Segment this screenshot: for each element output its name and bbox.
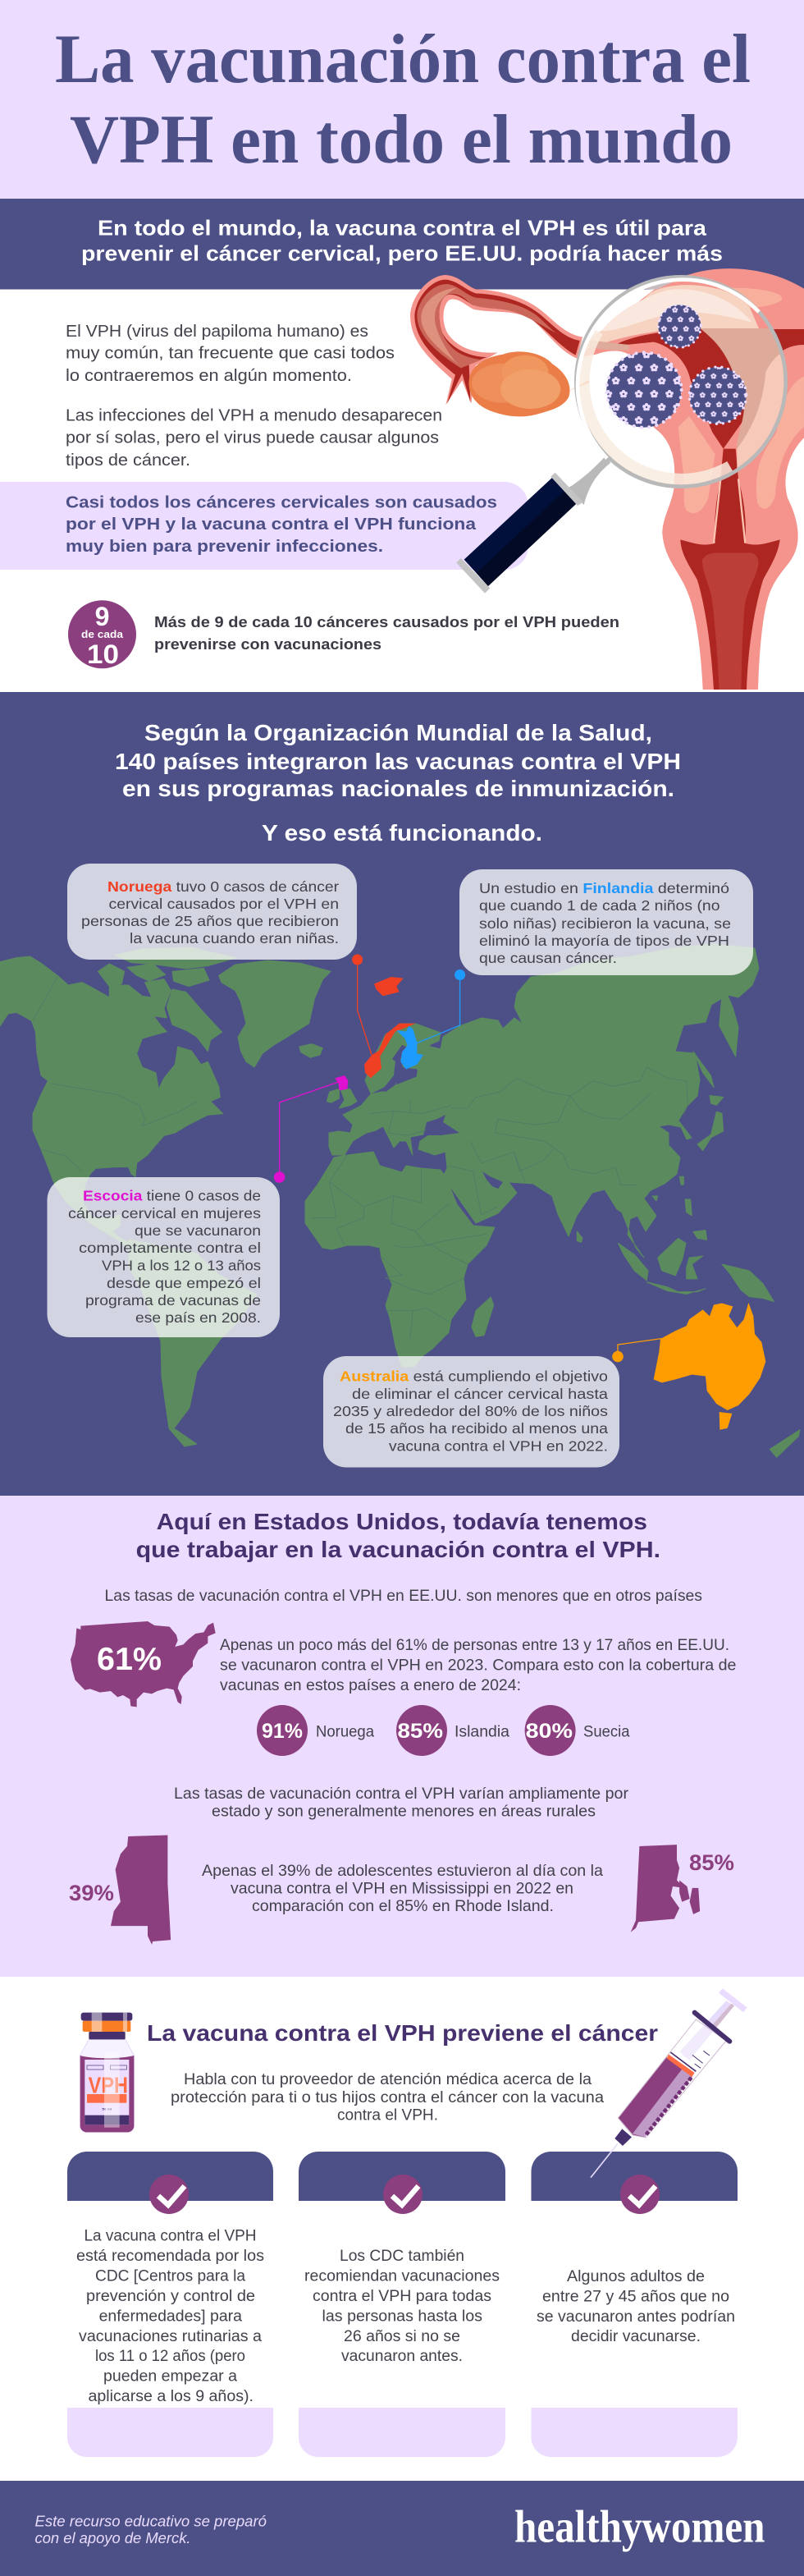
card text: aplicarse a los 9 años). (89, 2388, 254, 2405)
Norway and Svalbard highlighted (364, 977, 416, 1078)
stat: Islandia 85% (396, 1705, 509, 1756)
virus particles (606, 305, 747, 428)
callout: Noruega (67, 864, 357, 960)
Scandinavia (365, 1024, 441, 1093)
panel: title header (0, 0, 804, 199)
text: Mississippi vs Rhode Island: Apenas el 39% de adolescentes estuvieron al día con la (202, 1862, 603, 1880)
icon: check (620, 2175, 660, 2214)
callout: Finlandia: Un estudio en Finlandia determinó (479, 880, 729, 896)
callout: Noruega: personas de 25 años que recibieron (81, 913, 339, 929)
card text: La vacuna contra el VPH (84, 2227, 256, 2244)
logo wordmark: healthywomen (514, 2502, 765, 2553)
Iceland and Ireland and England (299, 1044, 357, 1108)
callout: Escocia: Escocia tiene 0 casos de (83, 1187, 261, 1203)
panel: United States section (0, 1496, 804, 1977)
callout: Australia: de eliminar el cáncer cervical hasta (352, 1386, 608, 1402)
callout: Escocia: desde que empezó el (107, 1275, 261, 1291)
stat: Suecia 80%: 80% (526, 1720, 573, 1743)
callout: Australia: de 15 años ha recibido al menos una (345, 1420, 608, 1437)
callout: Escocia (48, 1177, 280, 1337)
US map with 61% (71, 1621, 216, 1707)
Eurasia (329, 944, 759, 1258)
Rhode Island map with 85% (631, 1845, 734, 1932)
stat: Suecia 80% (525, 1705, 630, 1756)
card text: vacunaciones rutinarias a (79, 2328, 262, 2345)
callout: Noruega: Noruega tuvo 0 casos de cáncer (107, 878, 339, 895)
callout: key message pill: por el VPH y la vacuna contra el VPH funciona (66, 516, 477, 534)
callout: Escocia: programa de vacunas de (85, 1292, 261, 1309)
card: adults 27-45 (532, 2152, 738, 2457)
North America (0, 947, 236, 1248)
card text: entre 27 y 45 años que no (542, 2288, 729, 2305)
Mississippi map with 39%: 39% (69, 1881, 114, 1905)
panel: footer (0, 2481, 804, 2576)
seas (384, 1045, 503, 1189)
card text: las personas hasta los (322, 2308, 482, 2325)
icon: vaccine vial: VPH (89, 2072, 128, 2097)
Greenland (219, 960, 331, 1067)
stat: Noruega 91% (257, 1705, 374, 1756)
text: Mississippi vs Rhode Island: comparación con el 85% en Rhode Island. (252, 1897, 554, 1915)
callout: key message pill (0, 482, 528, 570)
text: 61% description: vacunas en estos países a enero de 2024: (220, 1676, 521, 1694)
callout: Finlandia: que cuando 1 de cada 2 niños (no (479, 897, 720, 914)
Madagascar and Sri Lanka (472, 1231, 582, 1336)
stat: Suecia 80%: Suecia (583, 1722, 630, 1740)
text: talk to provider: Habla con tu proveedor de atención médica acerca de la (184, 2071, 592, 2088)
world heading: Según la Organización Mundial de la Salud, (144, 720, 652, 745)
sponsor note (34, 2514, 267, 2546)
text: state variation: estado y son generalmente menores en áreas rurales (212, 1803, 596, 1821)
callout: Australia: Australia está cumpliendo el objetivo (340, 1368, 608, 1384)
card text: recomiendan vacunaciones (304, 2267, 500, 2285)
card text: se vacunaron antes podrían (537, 2308, 735, 2326)
card text (76, 2227, 264, 2405)
US map with 61%: 61% (97, 1642, 162, 1677)
text: 61% description (220, 1636, 736, 1694)
panel: vaccine prevents cancer section (0, 1977, 804, 2481)
uterus inner layers (613, 288, 804, 690)
text block: intro: Las infecciones del VPH a menudo desaparecen (66, 407, 442, 425)
text block: intro: por sí solas, pero el virus puede causar algunos (66, 429, 439, 447)
text block: intro: lo contraeremos en algún momento. (66, 367, 352, 385)
connector: Escocia (274, 1081, 341, 1183)
title: La vacunación contra el (55, 21, 751, 98)
connector: Noruega (352, 954, 372, 1055)
panel: world section (0, 692, 804, 1496)
subtitle heading: prevenir el cáncer cervical, pero EE.UU. podría hacer más (81, 241, 723, 266)
stat: 9 de cada 10: 10 (87, 639, 119, 669)
South America (129, 1240, 257, 1446)
text: state variation: Las tasas de vacunación contra el VPH varían ampliamente por (174, 1785, 629, 1803)
callout: Escocia: completamente contra el (79, 1240, 261, 1256)
card text: enfermedades] para (99, 2308, 242, 2325)
text: state variation (174, 1785, 629, 1821)
title: VPH en todo el mundo (70, 101, 733, 178)
icon: syringe (591, 1991, 745, 2178)
callout: Australia: vacuna contra el VPH en 2022. (389, 1438, 608, 1455)
icon: vaccine vial (80, 2013, 134, 2132)
text: Mississippi vs Rhode Island (202, 1862, 603, 1915)
callout: Escocia: cáncer cervical en mujeres (68, 1205, 261, 1222)
US heading: Aquí en Estados Unidos, todavía tenemos (157, 1509, 647, 1534)
callout: key message pill: Casi todos los cánceres cervicales son causados (66, 494, 497, 512)
text block: stat description (154, 613, 619, 653)
Australia highlighted (654, 1303, 765, 1430)
stat: 9 de cada 10 (68, 600, 136, 669)
icon: vaccine vial: 50 ml (102, 2107, 112, 2111)
stat: Islandia 85%: Islandia (455, 1722, 509, 1740)
callout: Escocia: que se vacunaron (135, 1222, 261, 1239)
card text: Los CDC también (340, 2248, 464, 2265)
stat: Noruega 91%: 91% (262, 1720, 303, 1743)
card: up to 26 (299, 2152, 505, 2457)
panel: subtitle band (0, 199, 804, 289)
connector: Australia (612, 1339, 661, 1362)
world heading: en sus programas nacionales de inmunización. (122, 776, 674, 801)
uterus body (582, 268, 804, 690)
sponsor note: Este recurso educativo se preparó (34, 2514, 267, 2530)
icon: check (149, 2175, 189, 2214)
card text: contra el VPH para todas (313, 2288, 491, 2305)
subtitle heading (81, 216, 723, 266)
US heading: que trabajar en la vacunación contra el VPH. (136, 1537, 660, 1562)
text: talk to provider: contra el VPH. (337, 2107, 438, 2125)
text block: intro: tipos de cáncer. (66, 451, 190, 470)
text block: intro: El VPH (virus del papiloma humano) es (66, 323, 368, 341)
magnifier lens (576, 277, 788, 487)
card text: vacunaron antes. (341, 2348, 463, 2365)
text: Mississippi vs Rhode Island: vacuna contra el VPH en Mississippi en 2022 en (231, 1880, 573, 1898)
card text: pueden empezar a (103, 2368, 237, 2386)
callout: Finlandia: eliminó la mayoría de tipos de VPH (479, 933, 729, 949)
callout: Noruega: la vacuna cuando eran niñas. (130, 930, 339, 947)
text: talk to provider (171, 2071, 604, 2125)
icon: check (383, 2175, 423, 2214)
callout: Escocia: ese país en 2008. (135, 1309, 261, 1326)
country borders (312, 1067, 688, 1338)
world heading (115, 720, 681, 846)
stat: Islandia 85%: 85% (397, 1720, 443, 1743)
card text: los 11 o 12 años (pero (95, 2348, 245, 2365)
Mississippi map with 39% (69, 1836, 171, 1945)
section heading: La vacuna contra el VPH previene el cáncer (147, 2020, 658, 2046)
illustration: uterus with magnifying glass and virus (410, 268, 804, 690)
card text: decidir vacunarse. (571, 2328, 701, 2345)
text: 61% description: se vacunaron contra el VPH en 2023. Compara esto con la cobertura de (220, 1657, 736, 1675)
ovary (468, 351, 621, 416)
text block: stat description: prevenirse con vacunaciones (154, 635, 381, 653)
card text: está recomendada por los (76, 2248, 264, 2265)
Africa (305, 1152, 495, 1367)
text: rates lower: Las tasas de vacunación contra el VPH en EE.UU. son menores que en otros países (105, 1587, 702, 1605)
text: 61% description: Apenas un poco más del 61% de personas entre 13 y 17 años en EE.UU. (220, 1636, 729, 1654)
title (55, 21, 751, 178)
card text: prevención y control de (86, 2288, 255, 2305)
Finland highlighted (396, 1026, 423, 1070)
stat: Noruega 91%: Noruega (316, 1722, 374, 1740)
text block: intro (66, 323, 442, 470)
sponsor note: con el apoyo de Merck. (34, 2530, 190, 2546)
world heading: Y eso está funcionando. (262, 820, 542, 846)
subtitle heading: En todo el mundo, la vacuna contra el VPH es útil para (98, 216, 707, 241)
card text (304, 2248, 500, 2365)
stat: 9 de cada 10: 9 (95, 602, 109, 631)
card text: Algunos adultos de (567, 2268, 705, 2285)
text: talk to provider: protección para ti o tus hijos contra el cáncer con la vacuna (171, 2089, 604, 2106)
callout: Finlandia: solo niñas) recibieron la vacuna, se (479, 915, 731, 932)
card text: 26 años si no se (344, 2328, 460, 2345)
magnifier handle (456, 454, 610, 594)
connector: Finlandia (410, 969, 465, 1046)
callout: Escocia: VPH a los 12 o 13 años (102, 1258, 261, 1274)
stat: 9 de cada 10: de cada (81, 628, 124, 640)
world heading: 140 países integraron las vacunas contra el VPH (115, 749, 681, 774)
callout: Noruega: cervical causados por el VPH en (108, 896, 339, 912)
callout: Finlandia (459, 869, 753, 975)
world map (0, 944, 800, 1457)
card: recommended for 11-12 (67, 2152, 273, 2457)
Rhode Island map with 85%: 85% (689, 1850, 734, 1875)
callout: key message pill: muy bien para prevenir infecciones. (66, 538, 383, 556)
Scotland highlighted (335, 1075, 348, 1090)
callout: Australia: 2035 y alrededor del 80% de los niños (333, 1403, 608, 1419)
fallopian tube (410, 275, 582, 405)
text block: stat description: Más de 9 de cada 10 cánceres causados por el VPH pueden (154, 613, 619, 630)
Asia-Pacific islands (618, 995, 800, 1457)
callout: Australia (323, 1356, 619, 1468)
card text (537, 2268, 735, 2345)
card text: CDC [Centros para la (95, 2267, 245, 2285)
US heading (136, 1509, 660, 1562)
text block: intro: muy común, tan frecuente que casi todos (66, 345, 395, 363)
callout: Finlandia: que causan cáncer. (479, 950, 617, 966)
